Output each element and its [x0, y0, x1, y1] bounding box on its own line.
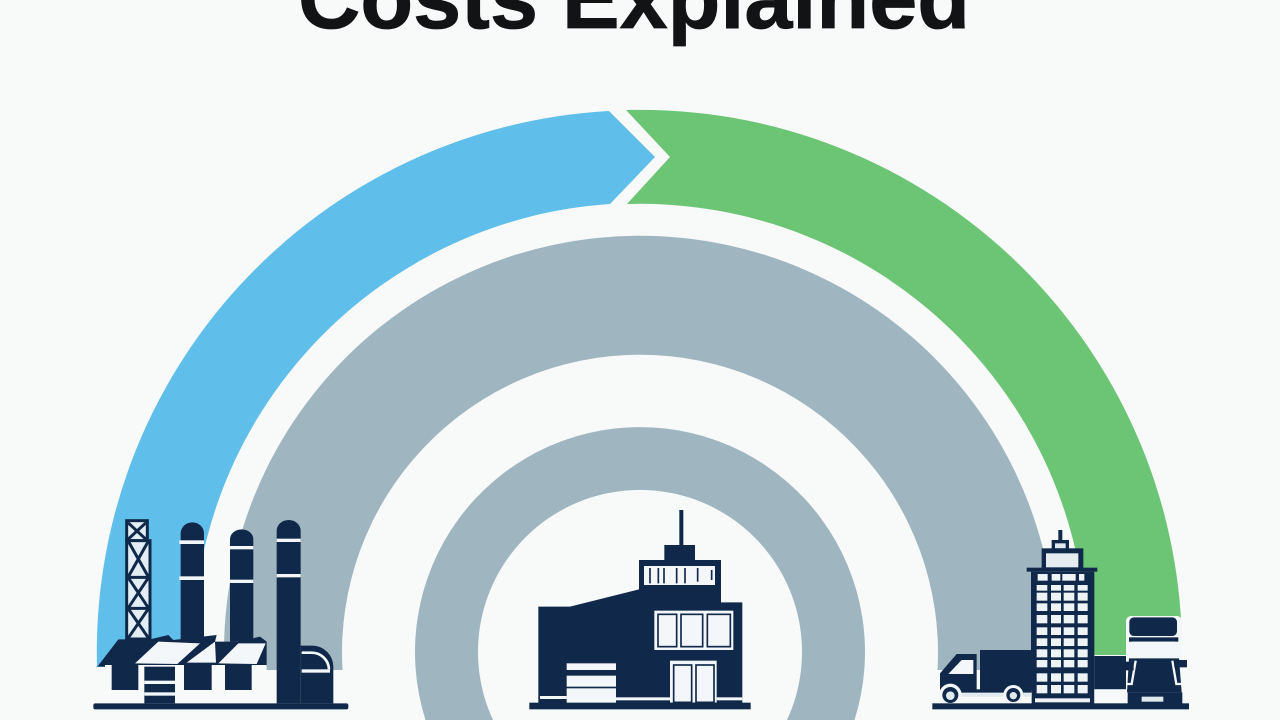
- building mass: [538, 510, 742, 703]
- upper windows: [654, 611, 733, 650]
- icon: factory: [93, 520, 348, 709]
- factory roofs and sheds: [97, 635, 267, 703]
- arc: green outer segment: [626, 110, 1182, 655]
- office tower: [1027, 530, 1097, 704]
- truck ground line: [932, 703, 1189, 709]
- garage: [540, 663, 742, 703]
- top window band: [644, 566, 715, 585]
- chimneys: [181, 520, 333, 703]
- arc: inner gray ring: [415, 427, 865, 720]
- arc: middle gray ring: [224, 236, 1056, 670]
- door: [670, 661, 717, 703]
- arc: blue outer segment: [97, 111, 655, 667]
- factory white footprint: [103, 670, 333, 703]
- tower windows: [1035, 574, 1090, 702]
- icon: central building: [529, 510, 751, 709]
- front-view truck: [1094, 616, 1187, 704]
- lattice tower: [126, 521, 150, 639]
- building ground line: [529, 703, 751, 709]
- factory ground line: [93, 703, 348, 709]
- icon: tower and trucks: [932, 530, 1189, 709]
- side-view truck: [935, 650, 1032, 706]
- chimney white bands: [179, 539, 330, 673]
